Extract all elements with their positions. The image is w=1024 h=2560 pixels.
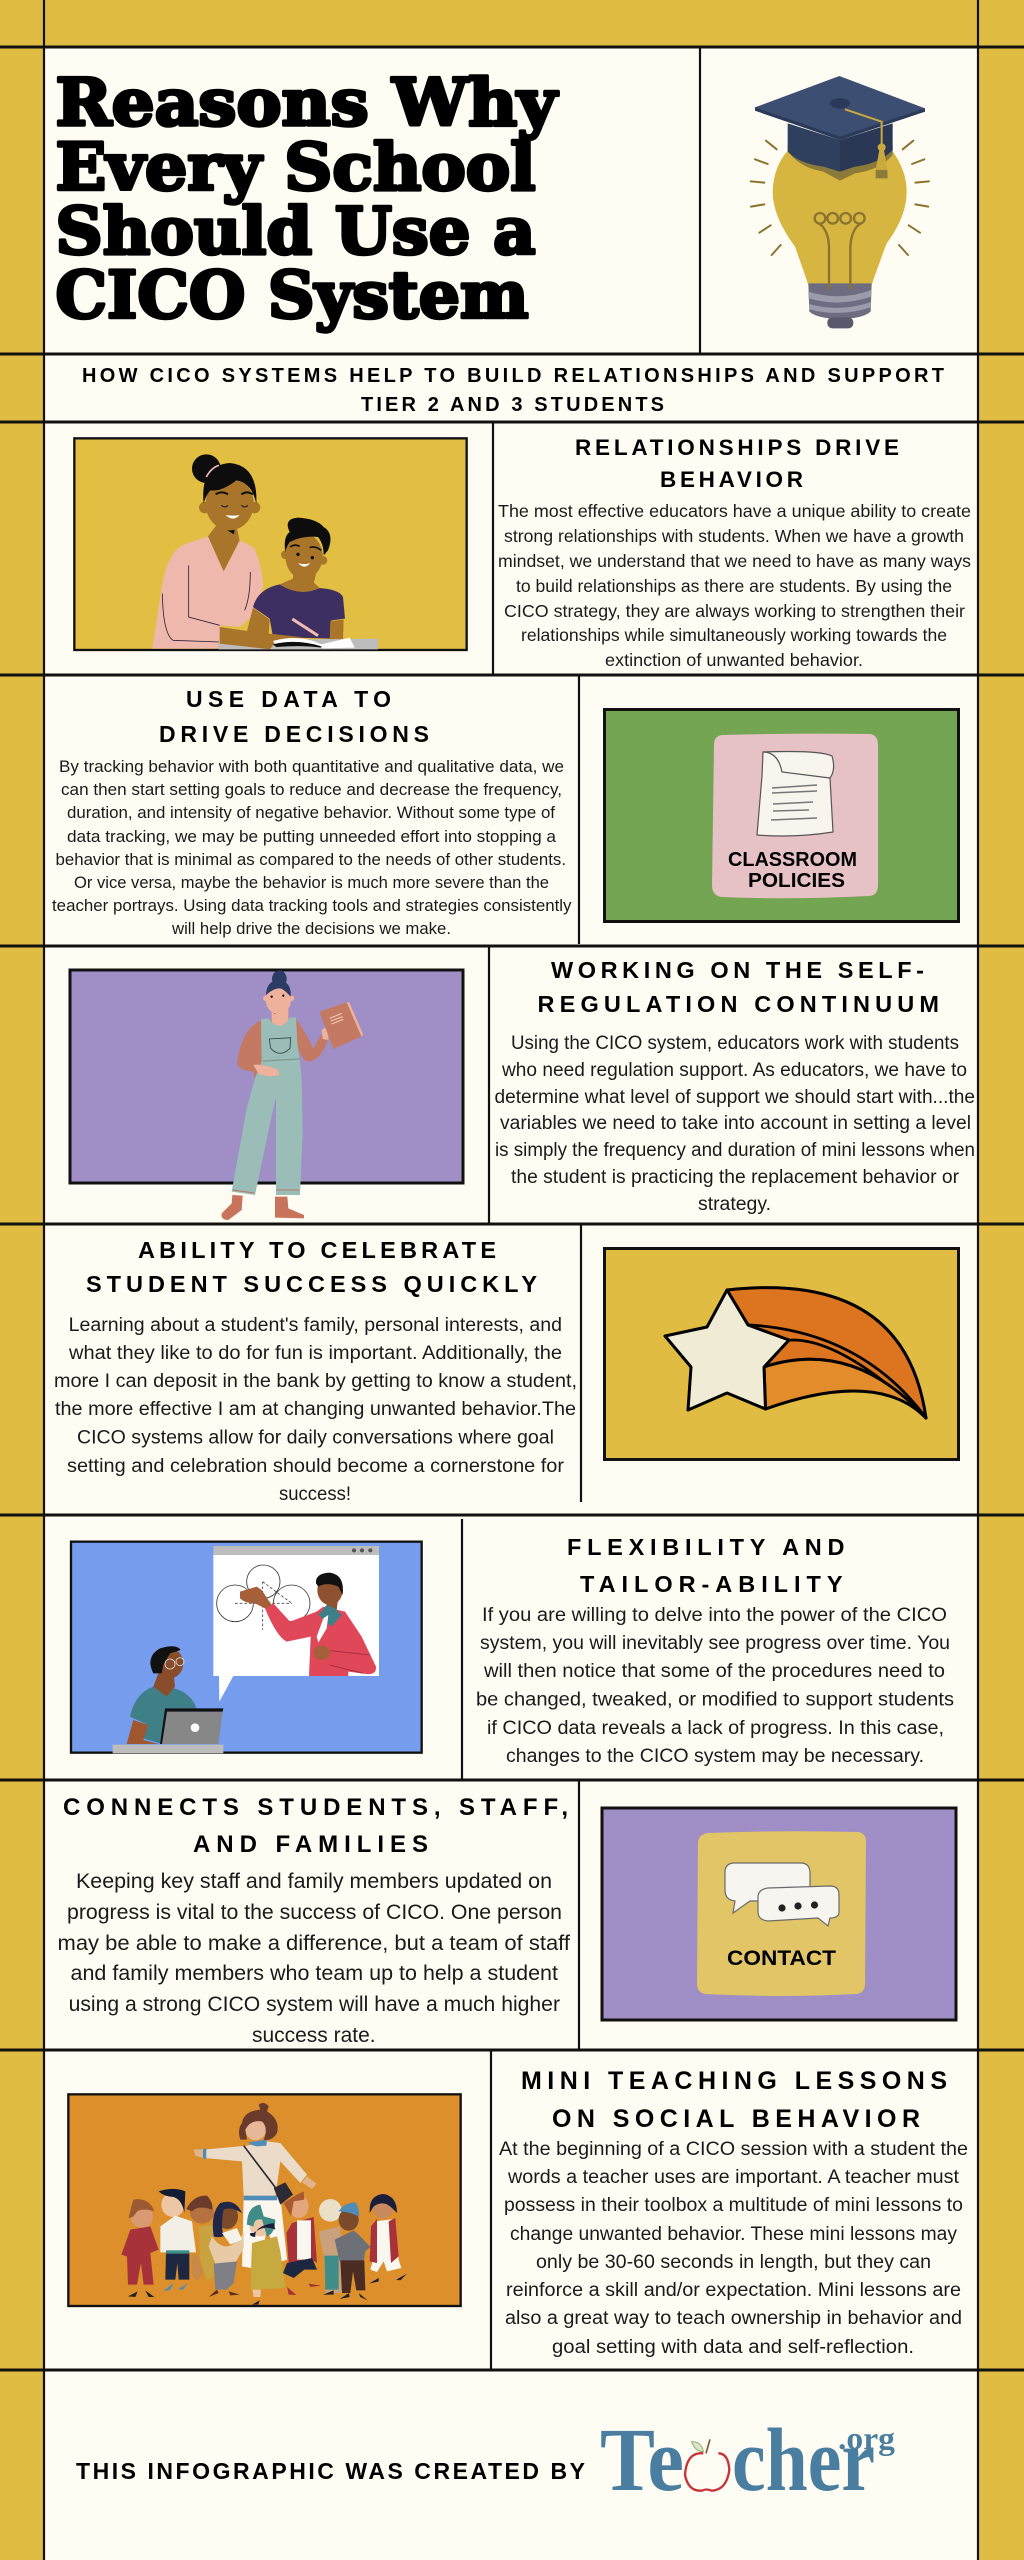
heading: ON SOCIAL BEHAVIOR [552,2105,920,2133]
logo: Teacher.org: cher [732,2411,875,2510]
heading [63,1794,568,1858]
icon: light bulb with graduation cap [751,76,929,328]
title: Every School [56,129,536,205]
heading: ABILITY TO CELEBRATE [138,1237,496,1263]
body text: system, you will inevitably see progress over time. You [480,1632,950,1654]
body text: more I can deposit in the bank by getting to know a student, [54,1370,577,1392]
heading: WORKING ON THE SELF- [551,957,924,983]
body text: goal setting with data and self-reflection. [552,2336,914,2358]
body text: to build relationships as there are students. By using the [516,576,952,596]
body text [494,1033,975,1215]
heading: CONNECTS STUDENTS, STAFF, [63,1794,568,1821]
body text: also a great way to teach ownership in behavior and [505,2307,962,2329]
heading [538,957,939,1017]
footer credit [76,2411,895,2510]
illustration: online teacher presentation [71,1542,422,1753]
body text: behavior that is minimal as compared to the needs of other students. [56,851,566,869]
body text: possess in their toolbox a multitude of mini lessons to [504,2194,963,2216]
body text: The most effective educators have a unique ability to create [498,501,971,521]
panel: use data to drive decisions [52,686,958,938]
body text [54,1314,577,1505]
body text: changes to the CICO system may be necessary. [506,1745,924,1767]
body text: the more effective I am at changing unwanted behavior.The [55,1398,576,1420]
body text [499,2138,968,2358]
heading [159,686,429,747]
body text [52,758,572,938]
body text: can then start setting goals to reduce and decrease the frequency, [61,781,562,799]
body text: extinction of unwanted behavior. [605,650,863,670]
illustration: shooting star [604,1248,958,1460]
body text [58,1870,570,2047]
footer text: THIS INFOGRAPHIC WAS CREATED BY [76,2458,585,2484]
illustration: teacher with group of children [68,2094,461,2306]
title [56,65,559,333]
logo: Teacher.org [600,2411,895,2510]
heading: REGULATION CONTINUUM [538,991,939,1017]
subtitle [82,365,944,416]
heading: FLEXIBILITY AND [567,1534,844,1560]
body text: will then notice that some of the procedures need to [483,1660,945,1682]
body text: will help drive the decisions we make. [171,920,451,938]
body text: the student is practicing the replacement behavior or [511,1167,960,1188]
body text: reinforce a skill and/or expectation. Mini lessons are [506,2279,961,2301]
body text: may be able to make a difference, but a team of staff [58,1932,570,1955]
heading [567,1534,844,1597]
body text: data tracking, we may be putting unneeded effort into stopping a [67,828,556,846]
illustration: contact card: CONTACT [727,1947,836,1970]
body text: words a teacher uses are important. A teacher must [507,2166,960,2188]
body text: mindset, we understand that we need to have as many ways [498,551,971,571]
body text: CICO systems allow for daily conversations where goal [77,1426,554,1448]
body text: strong relationships with students. When we have a growth [504,526,964,546]
heading: BEHAVIOR [660,467,803,492]
heading [575,435,899,492]
illustration: classroom policies card: CLASSROOM [728,849,857,871]
heading: MINI TEACHING LESSONS [521,2067,947,2095]
body text: is simply the frequency and duration of mini lessons when [495,1140,975,1161]
title: Reasons Why [56,65,559,141]
panel: relationships drive behavior [74,435,971,670]
panel: working on the self-regulation continuum [70,957,975,1220]
body text: progress is vital to the success of CICO. One person [67,1901,562,1924]
body text: Learning about a student's family, personal interests, and [69,1314,562,1336]
body text: duration, and intensity of negative behavior. Without some type of [67,804,556,822]
panel: ability to celebrate student success quickly [54,1237,958,1505]
illustration: contact card [602,1808,956,2020]
heading: DRIVE DECISIONS [159,721,429,747]
subtitle: TIER 2 AND 3 STUDENTS [361,394,664,416]
body text: determine what level of support we should start with...the [494,1087,975,1108]
body text: success rate. [252,2024,376,2047]
body text: if CICO data reveals a lack of progress. In this case, [487,1717,944,1739]
body text: relationships while simultaneously working towards the [521,625,947,645]
heading [521,2067,947,2133]
heading [86,1237,537,1297]
body text: only be 30-60 seconds in length, but they can [536,2251,931,2273]
illustration: teacher and student [74,438,467,650]
panel: connects students, staff, and families [58,1794,956,2047]
body text: change unwanted behavior. These mini lessons may [510,2223,957,2245]
body text [498,501,971,670]
heading: TAILOR-ABILITY [580,1571,843,1597]
heading: AND FAMILIES [193,1831,428,1858]
body text: be changed, tweaked, or modified to support students [476,1688,954,1710]
body text: CICO strategy, they are always working to strengthen their [504,601,965,621]
body text: setting and celebration should become a cornerstone for [67,1455,564,1477]
panel: flexibility and tailor-ability [71,1534,954,1767]
body text: and family members who team up to help a student [70,1962,558,1985]
body text: Keeping key staff and family members updated on [76,1870,552,1893]
body text: At the beginning of a CICO session with a student the [499,2138,968,2160]
heading: RELATIONSHIPS DRIVE [575,435,899,460]
panel: mini teaching lessons on social behavior [68,2067,968,2358]
body text: Or vice versa, maybe the behavior is much more severe than the [74,874,549,892]
heading: STUDENT SUCCESS QUICKLY [86,1271,537,1297]
title: CICO System [56,257,528,333]
heading: USE DATA TO [186,686,391,712]
illustration: classroom policies card: POLICIES [748,870,845,892]
body text: success! [279,1483,351,1505]
body text [476,1604,954,1767]
body text: strategy. [698,1194,771,1215]
body text: variables we need to take into account in setting a level [500,1113,971,1134]
title: Should Use a [56,193,536,269]
body text: what they like to do for fun is important. Additionally, the [68,1342,562,1364]
body text: who need regulation support. As educators, we have to [501,1060,967,1081]
logo: Teacher.org: .org [838,2420,895,2456]
illustration: teacher holding book [70,970,463,1220]
body text: If you are willing to delve into the power of the CICO [482,1604,947,1626]
illustration: classroom policies card [604,710,958,922]
body text: By tracking behavior with both quantitative and qualitative data, we [59,758,564,776]
body text: teacher portrays. Using data tracking tools and strategies consistently [52,897,572,915]
body text: using a strong CICO system will have a much higher [69,1993,560,2016]
body text: Using the CICO system, educators work with students [511,1033,959,1054]
logo: Teacher.org: Te [600,2411,684,2510]
subtitle: HOW CICO SYSTEMS HELP TO BUILD RELATIONSHIPS AND SUPPORT [82,365,944,387]
